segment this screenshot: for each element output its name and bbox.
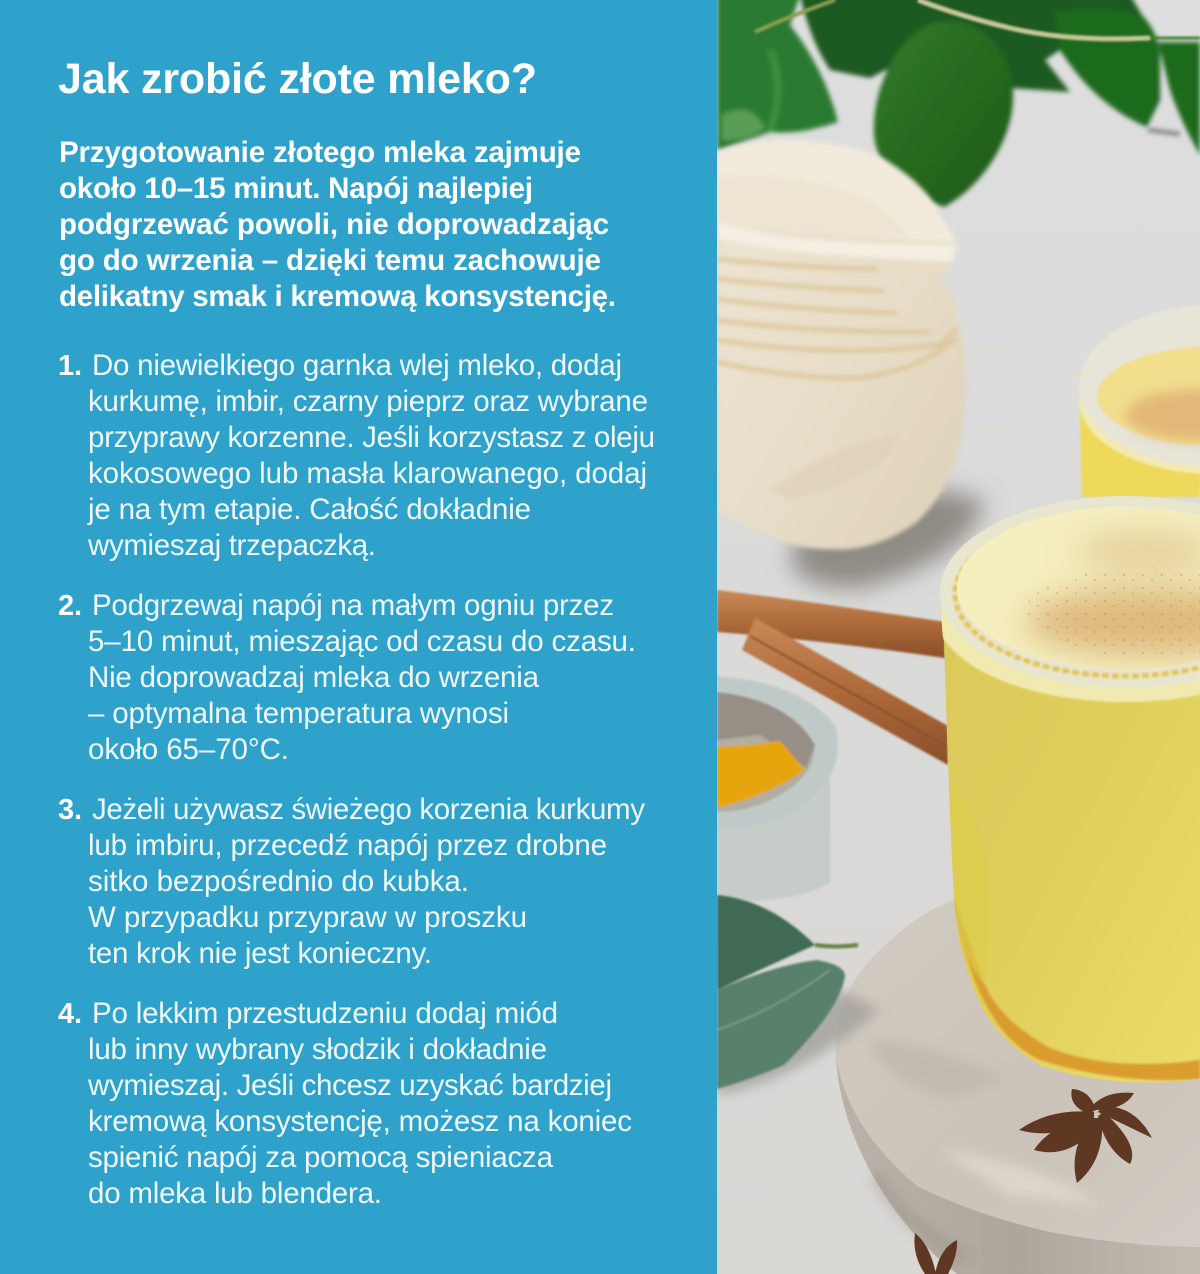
- intro paragraph: Przygotowanie złotego mleka zajmuje: [59, 136, 581, 169]
- step 2: 5–10 minut, mieszając od czasu do czasu.: [88, 625, 636, 658]
- step 3: Jeżeli używasz świeżego korzenia kurkumy: [92, 793, 645, 826]
- star anise on coaster: [1019, 1089, 1152, 1183]
- step 1: [58, 349, 655, 562]
- step 3: lub imbiru, przecedź napój przez drobne: [88, 829, 607, 862]
- cream ceramic jug: [717, 140, 966, 549]
- intro paragraph: go do wrzenia – dzięki temu zachowuje: [59, 244, 601, 277]
- step 1: Do niewielkiego garnka wlej mleko, dodaj: [92, 349, 622, 382]
- green bay leaves: [717, 895, 880, 1095]
- star anise at bottom edge: [914, 1233, 957, 1274]
- step 3: 3.: [58, 794, 82, 826]
- step 2: – optymalna temperatura wynosi: [88, 697, 509, 730]
- photo: golden milk still life: [717, 0, 1200, 1274]
- intro paragraph: [59, 136, 616, 313]
- jug shadow: [790, 490, 985, 588]
- step 2: [58, 589, 636, 766]
- intro paragraph: około 10–15 minut. Napój najlepiej: [59, 172, 533, 205]
- step 1: kurkumę, imbir, czarny pieprz oraz wybrane: [88, 385, 648, 418]
- step 3: [58, 793, 645, 970]
- step 4: lub inny wybrany słodzik i dokładnie: [88, 1033, 547, 1066]
- back glass of golden milk: [1079, 305, 1200, 497]
- step 2: około 65–70°C.: [88, 733, 289, 766]
- front glass of golden milk: [930, 496, 1200, 1100]
- blue text panel: [0, 0, 717, 1274]
- title: Jak zrobić złote mleko?: [58, 55, 537, 103]
- step 1: przyprawy korzenne. Jeśli korzystasz z oleju: [88, 421, 655, 454]
- step 1: je na tym etapie. Całość dokładnie: [87, 493, 531, 526]
- step 4: do mleka lub blendera.: [88, 1177, 382, 1210]
- intro paragraph: podgrzewać powoli, nie doprowadzając: [59, 208, 609, 241]
- step 4: [58, 997, 632, 1210]
- step 4: wymieszaj. Jeśli chcesz uzyskać bardziej: [87, 1069, 612, 1102]
- step 2: 2.: [58, 590, 82, 622]
- cinnamon sticks: [717, 590, 948, 765]
- small ceramic bowl with turmeric: [717, 676, 838, 901]
- step 3: W przypadku przypraw w proszku: [88, 901, 527, 934]
- marble coaster: [836, 890, 1200, 1274]
- step 1: kokosowego lub masła klarowanego, dodaj: [88, 457, 647, 490]
- green leaves and branch: [717, 0, 1200, 207]
- step 4: kremową konsystencję, możesz na koniec: [88, 1105, 632, 1138]
- step 2: Podgrzewaj napój na małym ogniu przez: [92, 589, 614, 622]
- step 3: sitko bezpośrednio do kubka.: [88, 865, 469, 898]
- step 4: spienić napój za pomocą spieniacza: [88, 1141, 554, 1174]
- step 4: 4.: [58, 998, 82, 1030]
- step 1: wymieszaj trzepaczką.: [87, 529, 376, 562]
- step 4: Po lekkim przestudzeniu dodaj miód: [92, 997, 558, 1030]
- step 1: 1.: [58, 350, 82, 382]
- intro paragraph: delikatny smak i kremową konsystencję.: [59, 280, 616, 313]
- step 3: ten krok nie jest konieczny.: [88, 937, 432, 970]
- step 2: Nie doprowadzaj mleka do wrzenia: [88, 661, 540, 694]
